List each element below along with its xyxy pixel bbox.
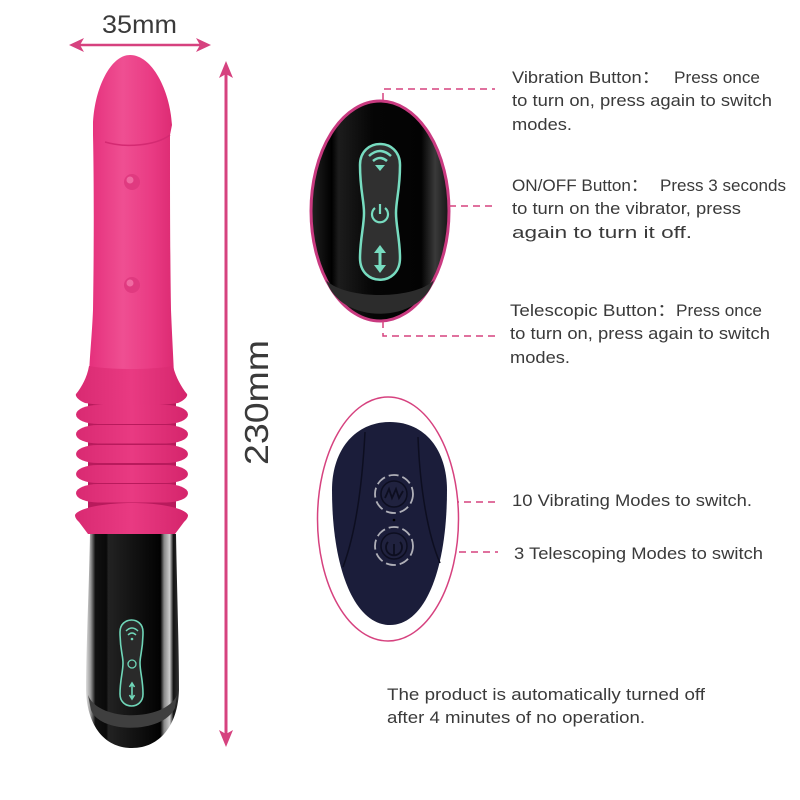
on/off button text: again to turn it off. <box>512 223 692 242</box>
telescopic button text <box>510 301 770 367</box>
ribs <box>76 405 188 424</box>
vibration button text: modes. <box>512 115 572 134</box>
icon: power button <box>375 527 413 565</box>
icon: power <box>372 204 388 222</box>
lower flange <box>75 503 188 534</box>
button panel <box>360 144 400 280</box>
telescopic button text: modes. <box>510 348 570 367</box>
modes text: 10 Vibrating Modes to switch. <box>512 491 752 510</box>
rib grooves backing <box>88 396 176 508</box>
nubs <box>124 174 140 190</box>
auto off note: The product is automatically turned off <box>387 685 705 704</box>
callout lines <box>383 89 498 552</box>
vibration button text: Vibration Button： <box>512 68 660 87</box>
height dimension: 230mm <box>219 61 275 747</box>
modes text: 3 Telescoping Modes to switch <box>514 544 763 563</box>
telescopic button text: Telescopic Button： <box>510 301 676 320</box>
icon: telescopic arrows <box>374 245 386 273</box>
width dimension: 35mm <box>69 11 211 52</box>
auto off note <box>387 685 705 727</box>
remote control oval <box>318 397 458 641</box>
on/off button text: Press 3 seconds <box>660 176 786 195</box>
icon: vibration button <box>375 475 413 513</box>
modes text <box>512 491 763 563</box>
on/off button text <box>512 176 786 242</box>
width dimension: 35mm: 35mm <box>102 11 177 39</box>
handle control panel <box>120 620 143 706</box>
on/off button text: to turn on the vibrator, press <box>512 199 741 218</box>
collar <box>76 366 187 406</box>
product illustration <box>75 55 188 748</box>
black handle <box>86 534 179 748</box>
button close-up oval <box>311 101 449 321</box>
vibration button text: to turn on, press again to switch <box>512 91 772 110</box>
vibration button text <box>512 68 772 134</box>
telescopic button text: to turn on, press again to switch <box>510 324 770 343</box>
vibration button text: Press once <box>674 68 760 87</box>
remote body <box>332 422 447 625</box>
telescopic button text: Press once <box>676 301 762 320</box>
auto off note: after 4 minutes of no operation. <box>387 708 645 727</box>
on/off button text: ON/OFF Button： <box>512 176 648 195</box>
pink shaft <box>89 55 174 375</box>
height dimension: 230mm: 230mm <box>238 340 275 465</box>
icon: wifi vibration <box>369 151 391 171</box>
